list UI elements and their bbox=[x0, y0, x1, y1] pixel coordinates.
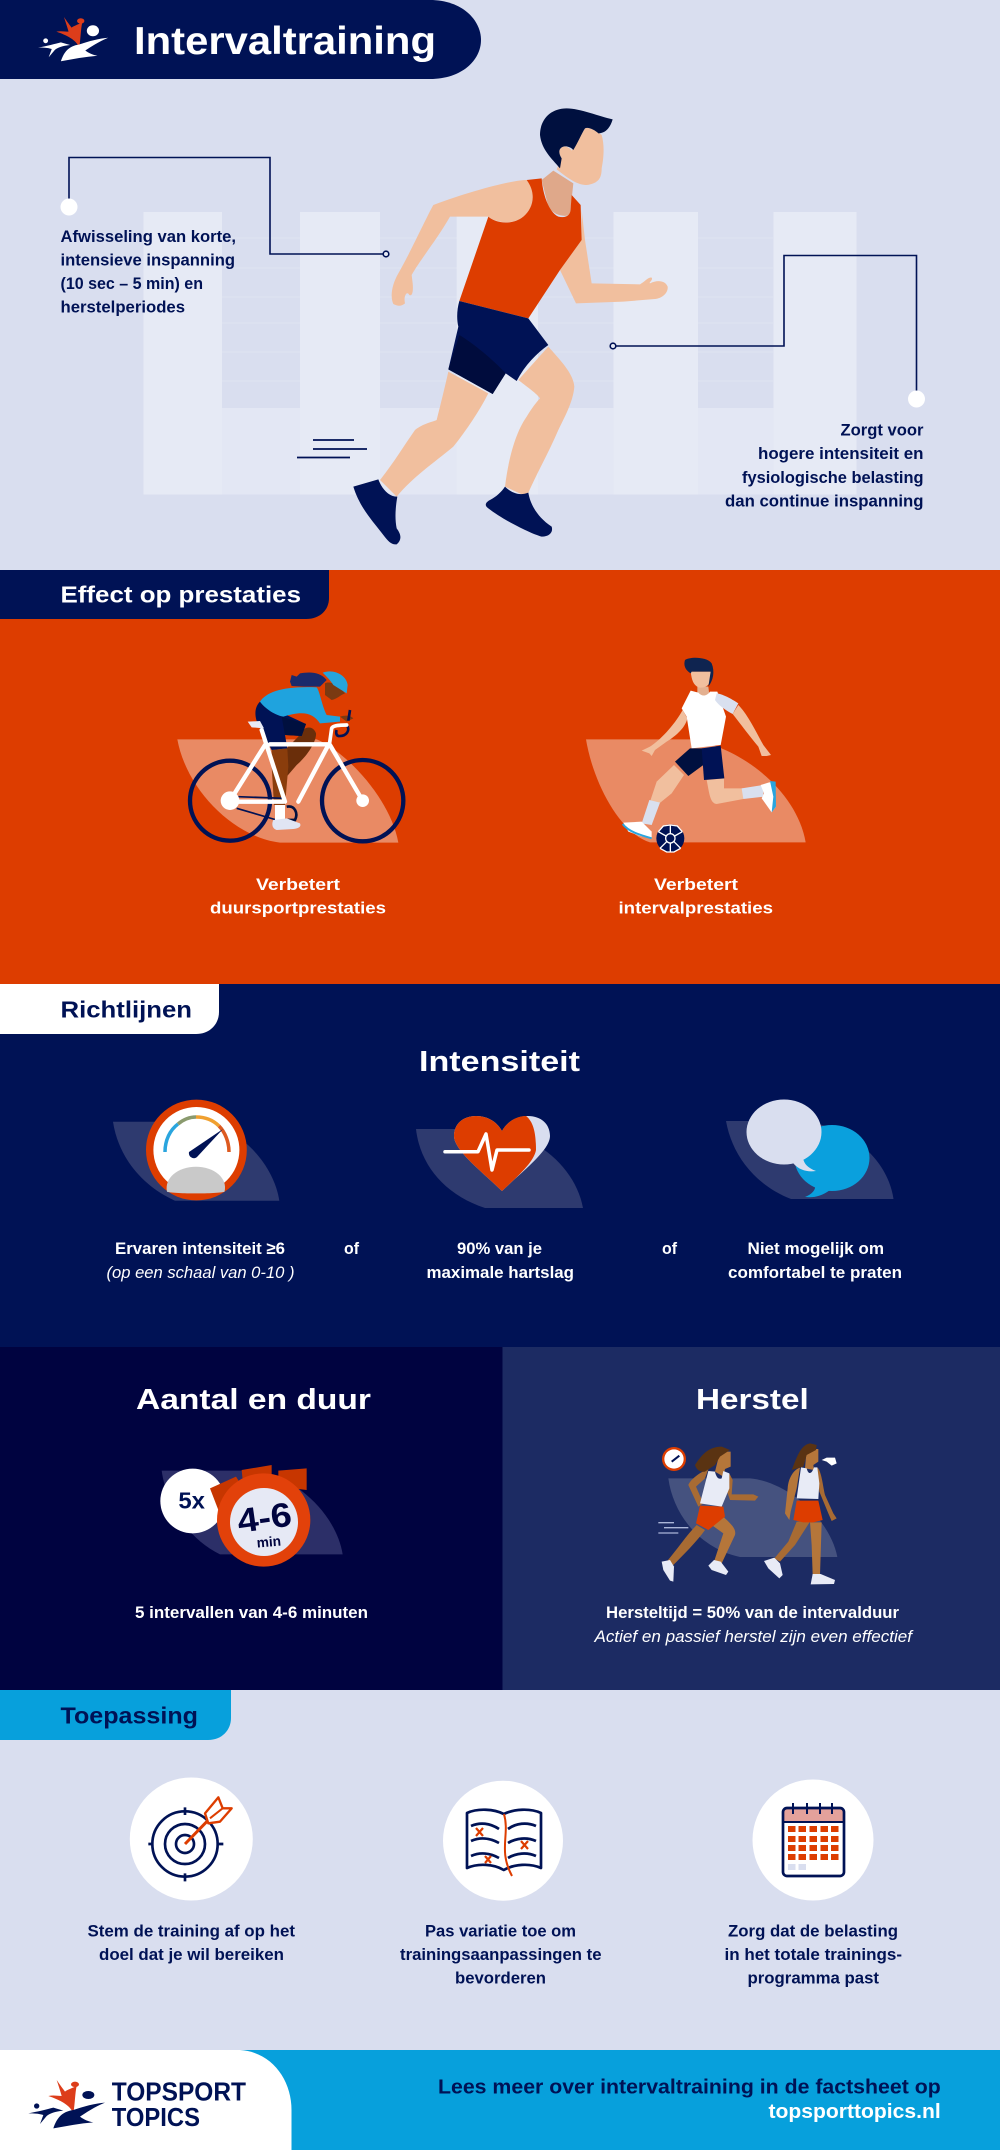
heading: herstel: Herstel bbox=[696, 1384, 809, 1416]
callout text: left: (10 sec – 5 min) en bbox=[60, 274, 203, 293]
section tab: effect op prestaties bbox=[0, 570, 329, 619]
icon: stopwatch 5x: 5x bbox=[178, 1487, 205, 1513]
label: hersteltijd: Actief en passief herstel zijn even effectief bbox=[593, 1628, 914, 1646]
call to action: topsporttopics.nl bbox=[768, 2101, 941, 2123]
heading: intensiteit: Intensiteit bbox=[419, 1046, 580, 1078]
callout connector: left bbox=[60, 158, 389, 257]
icon: stopwatch 5x bbox=[160, 1465, 343, 1567]
text: belasting: in het totale trainings- bbox=[724, 1945, 902, 1964]
icon: header logo bbox=[38, 17, 108, 61]
text: variatie bbox=[400, 1922, 602, 1987]
label: ervaren intensiteit: Ervaren intensiteit ≥6 bbox=[115, 1239, 285, 1258]
label: ervaren intensiteit bbox=[106, 1239, 294, 1282]
icon: target with arrow bbox=[130, 1778, 253, 1900]
text: doel: Stem de training af op het bbox=[88, 1922, 295, 1941]
label: 5 intervallen: 5 intervallen van 4-6 minuten bbox=[135, 1603, 368, 1622]
label: praten: comfortabel te praten bbox=[728, 1263, 902, 1282]
panel: hero bbox=[0, 0, 1000, 570]
call to action: Lees meer over intervaltraining in de factsheet op bbox=[438, 2076, 941, 2098]
label: hartslag bbox=[426, 1239, 574, 1282]
illustration: two runners bbox=[658, 1443, 837, 1584]
callout text: right bbox=[725, 420, 924, 510]
panel: herstel bbox=[502, 1347, 1000, 1690]
logo wordmark: TOPSPORT bbox=[112, 2077, 246, 2107]
logo wordmark bbox=[112, 2077, 246, 2132]
text: belasting bbox=[724, 1922, 902, 1987]
icon: stopwatch 5x: min bbox=[256, 1533, 282, 1551]
footer logo bbox=[0, 2050, 292, 2150]
panel: richtlijnen bbox=[0, 984, 1000, 1347]
label: hersteltijd: Hersteltijd = 50% van de intervalduur bbox=[606, 1603, 899, 1622]
heading: aantal en duur: Aantal en duur bbox=[136, 1384, 371, 1416]
runner two bbox=[764, 1443, 837, 1584]
icon: open book bbox=[443, 1781, 563, 1901]
label: duursportprestaties bbox=[210, 875, 386, 917]
callout text: left: Afwisseling van korte, bbox=[60, 227, 236, 246]
section tab: toepassing: Toepassing bbox=[60, 1702, 198, 1728]
label: duursportprestaties: Verbetert bbox=[256, 875, 340, 894]
icon: heart with pulse bbox=[416, 1116, 583, 1208]
text: belasting: programma past bbox=[748, 1968, 879, 1987]
title: Intervaltraining bbox=[134, 20, 436, 63]
section tab: richtlijnen bbox=[0, 984, 219, 1034]
label: praten: Niet mogelijk om bbox=[748, 1239, 884, 1258]
callout text: right: hogere intensiteit en bbox=[758, 444, 924, 463]
header banner bbox=[0, 0, 481, 79]
callout text: left bbox=[60, 227, 236, 316]
label: duursportprestaties: duursportprestaties bbox=[210, 898, 386, 917]
label: hartslag: 90% van je bbox=[457, 1239, 542, 1258]
illustration: runner bbox=[353, 108, 668, 544]
icon: stopwatch bbox=[662, 1447, 686, 1471]
label: intervalprestaties bbox=[618, 875, 773, 917]
label: of: of bbox=[344, 1239, 359, 1258]
icon: calendar bbox=[752, 1780, 874, 1900]
panel: aantal en duur bbox=[0, 1347, 502, 1690]
label: intervalprestaties: intervalprestaties bbox=[618, 898, 773, 917]
callout text: right: dan continue inspanning bbox=[725, 492, 924, 510]
label: praten bbox=[728, 1239, 902, 1282]
call to action bbox=[438, 2076, 941, 2123]
callout text: left: herstelperiodes bbox=[60, 298, 185, 316]
callout connector: right bbox=[610, 256, 925, 408]
panel: effect op prestaties bbox=[0, 570, 1000, 985]
label: intervalprestaties: Verbetert bbox=[654, 875, 738, 894]
section tab: toepassing bbox=[0, 1690, 231, 1740]
icon: stopwatch 5x: 4-6 bbox=[235, 1496, 294, 1541]
illustration: soccer player bbox=[586, 658, 806, 852]
label: hersteltijd bbox=[593, 1603, 914, 1646]
text: variatie: bevorderen bbox=[455, 1968, 546, 1987]
text: doel: doel dat je wil bereiken bbox=[99, 1945, 284, 1964]
label: hartslag: maximale hartslag bbox=[426, 1263, 574, 1282]
label: of: of bbox=[662, 1239, 677, 1258]
text: belasting: Zorg dat de belasting bbox=[728, 1922, 898, 1941]
illustration: cyclist bbox=[177, 671, 403, 843]
icon: gauge bbox=[113, 1100, 279, 1201]
runner one bbox=[662, 1447, 758, 1582]
text: doel bbox=[88, 1922, 295, 1964]
section tab: richtlijnen: Richtlijnen bbox=[60, 996, 192, 1022]
logo wordmark: TOPICS bbox=[112, 2102, 200, 2132]
panel: footer bbox=[0, 2050, 1000, 2150]
background interval bars bbox=[144, 212, 856, 494]
label: ervaren intensiteit: (op een schaal van 0-10 ) bbox=[106, 1264, 294, 1282]
icon: footer logo mark bbox=[28, 2080, 105, 2128]
callout text: left: intensieve inspanning bbox=[60, 250, 235, 270]
callout text: right: fysiologische belasting bbox=[742, 468, 924, 487]
speed lines bbox=[297, 440, 367, 458]
text: variatie: Pas variatie toe om bbox=[425, 1922, 576, 1941]
icon: speech bubbles bbox=[726, 1100, 894, 1199]
panel: toepassing bbox=[0, 1690, 1000, 2052]
text: variatie: trainingsaanpassingen te bbox=[400, 1945, 602, 1964]
callout text: right: Zorgt voor bbox=[840, 420, 924, 440]
section tab: effect op prestaties: Effect op prestaties bbox=[60, 582, 301, 608]
